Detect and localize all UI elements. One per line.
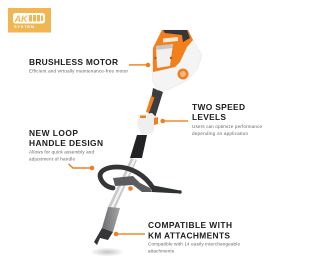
text block: compatible with km attachments: KM ATTACHMENTS [148, 230, 230, 240]
text block: new loop handle design: Allows for quick assembly and [29, 150, 94, 154]
text block: compatible with km attachments: COMPATIBLE WITH [148, 220, 232, 230]
text block: two speed levels: Users can optimize performance [192, 124, 262, 129]
text block: compatible with km attachments: Compatible with 14 easily interchangeable [148, 242, 240, 246]
text block: brushless motor: BRUSHLESS MOTOR [29, 57, 118, 67]
black collar [130, 135, 147, 158]
loop handle [100, 167, 153, 188]
text block: compatible with km attachments: attachments [148, 248, 175, 254]
coupling sleeve [102, 207, 120, 232]
illustration: trimmer power head [90, 30, 202, 256]
orange knob [128, 186, 133, 191]
text block: two speed levels [192, 102, 262, 136]
orange strip [146, 96, 154, 113]
window latches [154, 57, 172, 59]
arrow: attachments leader [114, 232, 145, 236]
text block: new loop handle design [29, 128, 103, 162]
badge: AK system: AK [14, 14, 29, 24]
handle clamp [113, 176, 152, 192]
text block: compatible with km attachments [148, 220, 240, 254]
window top shading [156, 44, 173, 50]
white label [163, 37, 178, 42]
text block: brushless motor: Efficient and virtually maintenance-free motor [29, 68, 128, 74]
badge: AK system: SYSTEM [14, 24, 35, 29]
lower shaft [108, 158, 137, 209]
upper shaft [148, 88, 163, 118]
badge: AK system [8, 8, 51, 32]
orange round logo [178, 68, 188, 80]
arrow: motor leader [129, 63, 150, 67]
text block: brushless motor [29, 57, 128, 74]
text block: two speed levels: depending on application [192, 131, 248, 136]
text block: new loop handle design: adjustment of handle [29, 156, 75, 162]
handle grip [151, 185, 180, 194]
arrow: handle leader [68, 164, 94, 170]
coupling foot [94, 228, 113, 245]
text block: two speed levels: TWO SPEED [192, 102, 245, 112]
switch box accents [140, 116, 158, 125]
text block: new loop handle design: NEW LOOP [29, 128, 78, 138]
battery body [152, 30, 202, 90]
orange panel [153, 30, 193, 72]
arrow: speed leader [160, 119, 188, 123]
switch box [137, 113, 157, 135]
white window [156, 44, 173, 68]
text block: new loop handle design: HANDLE DESIGN [29, 138, 103, 148]
dark battery slot [163, 30, 190, 42]
ground shadow [90, 248, 124, 256]
text block: two speed levels: LEVELS [192, 112, 226, 122]
